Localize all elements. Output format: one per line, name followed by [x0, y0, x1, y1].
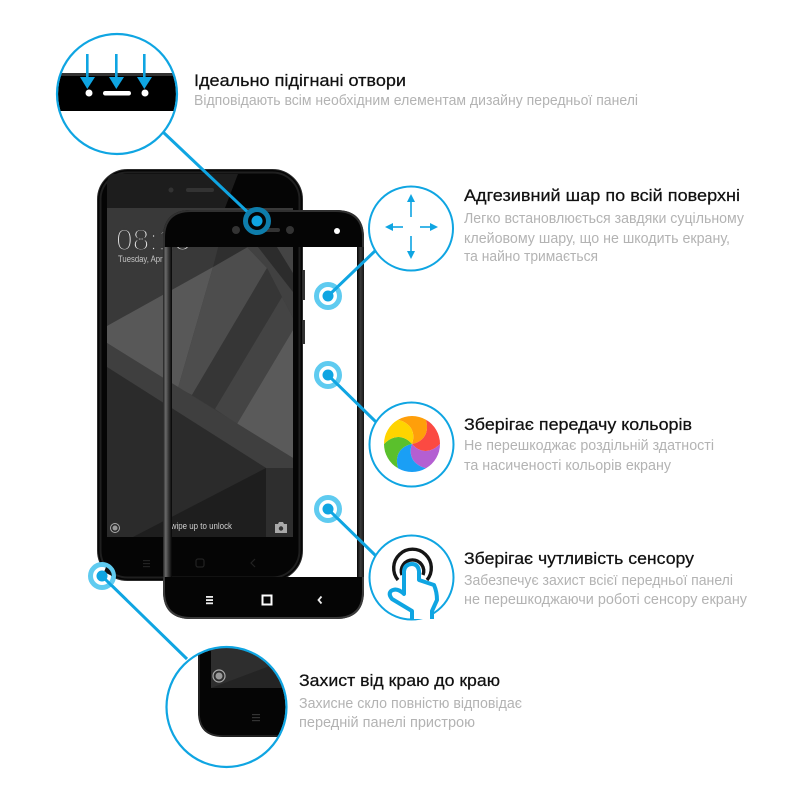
- marker: touch: [316, 498, 340, 520]
- text block: touch: Зберігає чутливість сенсору: [464, 549, 695, 568]
- icon: three arrows: [80, 54, 152, 89]
- text block: edge: Захисне скло повністю відповідає: [299, 695, 522, 712]
- marker: edge: [90, 564, 114, 588]
- icon: colour wheel: [380, 416, 444, 472]
- text block: adhesive: [464, 186, 744, 265]
- connector lines: [102, 132, 376, 659]
- callout circle: colour wheel: [370, 402, 454, 486]
- text block: holes: Відповідають всім необхідним елементам дизайну передньої панелі: [194, 92, 638, 109]
- text block: edge: передній панелі пристрою: [299, 714, 475, 731]
- marker: adhesive layer: [316, 284, 340, 308]
- callout circle: edge detail: [165, 646, 288, 768]
- back phone wallpaper: 08:15: [116, 224, 191, 257]
- front phone nav icons: [206, 596, 322, 604]
- callout circle: touch: [370, 536, 454, 620]
- text block: touch: Забезпечує захист всієї передньої панелі: [464, 572, 733, 589]
- icon: touch rings: [394, 549, 431, 580]
- text block: adhesive: Адгезивний шар по всій поверхні: [464, 186, 740, 205]
- marker: top holes: [246, 210, 268, 232]
- marker: colours: [316, 364, 340, 386]
- back phone: [98, 170, 305, 580]
- front glass protector: [163, 210, 364, 619]
- text block: touch: не перешкоджаючи роботі сенсору екрану: [464, 591, 747, 608]
- callout circle: holes detail: [50, 34, 190, 154]
- text block: colours: та насиченості кольорів екрану: [464, 457, 671, 474]
- text block: adhesive: Легко встановлюється завдяки суцільному: [464, 210, 744, 227]
- callout circle: adhesive arrows: [369, 186, 453, 270]
- text block: colours: Не перешкоджає роздільній здатності: [464, 437, 714, 454]
- text block: adhesive: клейовому шару, що не шкодить екрану,: [464, 230, 730, 247]
- icon: hand: [390, 564, 437, 619]
- text block: edge: Захист від краю до краю: [299, 671, 500, 690]
- text block: adhesive: та найно тримається: [464, 248, 598, 265]
- text block: holes: Ідеально підігнані отвори: [194, 71, 406, 90]
- icon: four arrows: [385, 194, 438, 259]
- back phone wallpaper: Swipe up to unlock: [166, 521, 232, 531]
- text block: holes: [194, 71, 638, 109]
- text block: edge: [299, 671, 522, 731]
- text block: touch: [464, 549, 747, 608]
- back phone wallpaper: [107, 208, 293, 537]
- back phone wallpaper: Tuesday, April: [118, 254, 166, 264]
- text block: colours: Зберігає передачу кольорів: [464, 415, 692, 434]
- text block: colours: [464, 415, 714, 474]
